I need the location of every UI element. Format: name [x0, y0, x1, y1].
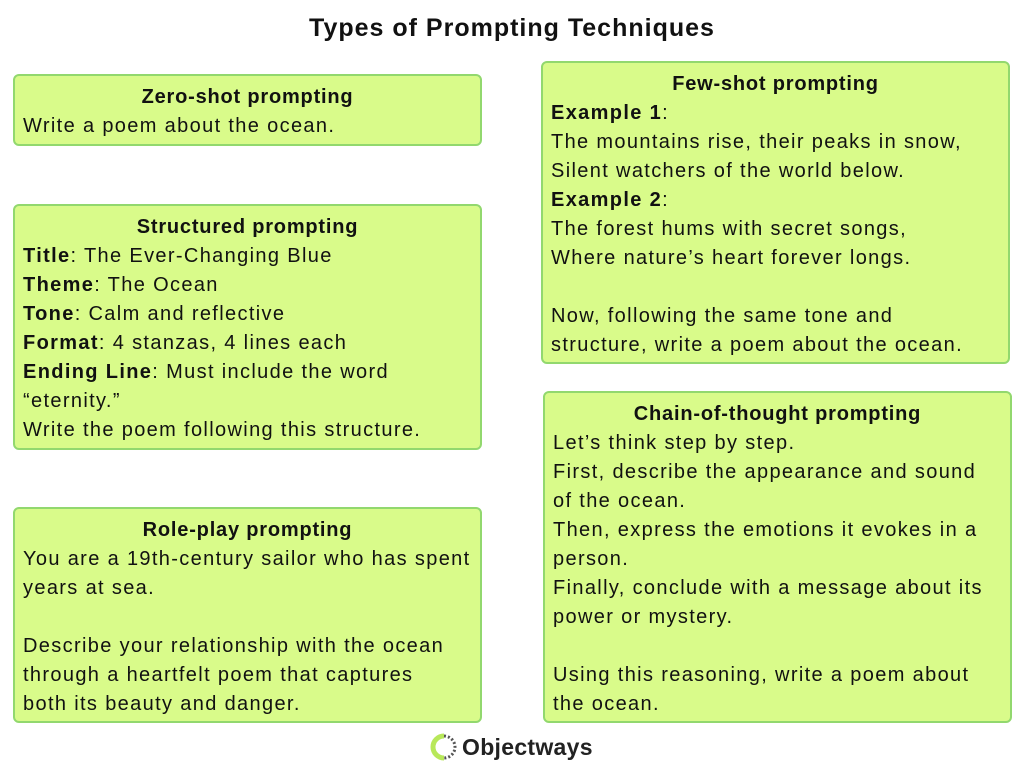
panel: zero-shot	[13, 74, 482, 146]
panel: chain-of-thought: person.	[553, 548, 629, 570]
panel: few-shot: The mountains rise, their peaks in snow,	[551, 131, 962, 153]
panel: chain-of-thought: Finally, conclude with a message about its	[553, 577, 983, 599]
panel: structured: Theme: The Ocean	[23, 274, 219, 296]
panel: role-play: Describe your relationship with the ocean	[23, 635, 444, 657]
panel: role-play: both its beauty and danger.	[23, 693, 301, 715]
panel: chain-of-thought: Let’s think step by step.	[553, 432, 795, 454]
panel: role-play: through a heartfelt poem that captures	[23, 664, 413, 686]
panel: structured: Format: 4 stanzas, 4 lines each	[23, 332, 347, 354]
panel: chain-of-thought: Chain-of-thought prompting	[634, 403, 921, 425]
panel: chain-of-thought: the ocean.	[553, 693, 660, 715]
panel: few-shot: Now, following the same tone and	[551, 305, 893, 327]
panel: chain-of-thought: power or mystery.	[553, 606, 733, 628]
panel: structured	[13, 204, 482, 450]
panel: structured: Structured prompting	[137, 216, 358, 238]
panel: chain-of-thought: of the ocean.	[553, 490, 686, 512]
panel: structured: Ending Line: Must include the word	[23, 361, 389, 383]
icon: logo ring	[430, 734, 456, 760]
panel: few-shot: The forest hums with secret songs,	[551, 218, 907, 240]
panel: chain-of-thought: Then, express the emotions it evokes in a	[553, 519, 977, 541]
panel: few-shot: Where nature’s heart forever longs.	[551, 247, 911, 269]
panel: chain-of-thought: First, describe the appearance and sound	[553, 461, 976, 483]
panel: few-shot: Example 2:	[551, 189, 669, 211]
panel: chain-of-thought	[543, 391, 1012, 723]
panel: role-play: years at sea.	[23, 577, 155, 599]
panel: few-shot: structure, write a poem about the ocean.	[551, 334, 963, 356]
panel: role-play: You are a 19th-century sailor who has spent	[23, 548, 471, 570]
logo: Objectways: Objectways	[462, 734, 593, 760]
panel: structured: “eternity.”	[23, 390, 121, 412]
panel: few-shot: Few-shot prompting	[672, 73, 879, 95]
panel: few-shot: Example 1:	[551, 102, 669, 124]
panel: few-shot	[541, 61, 1010, 364]
panel: zero-shot: Write a poem about the ocean.	[23, 115, 335, 137]
title: Types of Prompting Techniques	[309, 14, 715, 42]
panel: role-play: Role-play prompting	[143, 519, 352, 541]
panel: few-shot: Silent watchers of the world below.	[551, 160, 905, 182]
panel: role-play	[13, 507, 482, 723]
panel: structured: Tone: Calm and reflective	[23, 303, 285, 325]
panel: chain-of-thought: Using this reasoning, write a poem about	[553, 664, 969, 686]
panel: structured: Title: The Ever-Changing Blue	[23, 245, 333, 267]
panel: structured: Write the poem following this structure.	[23, 419, 421, 441]
panel: zero-shot: Zero-shot prompting	[142, 86, 353, 108]
